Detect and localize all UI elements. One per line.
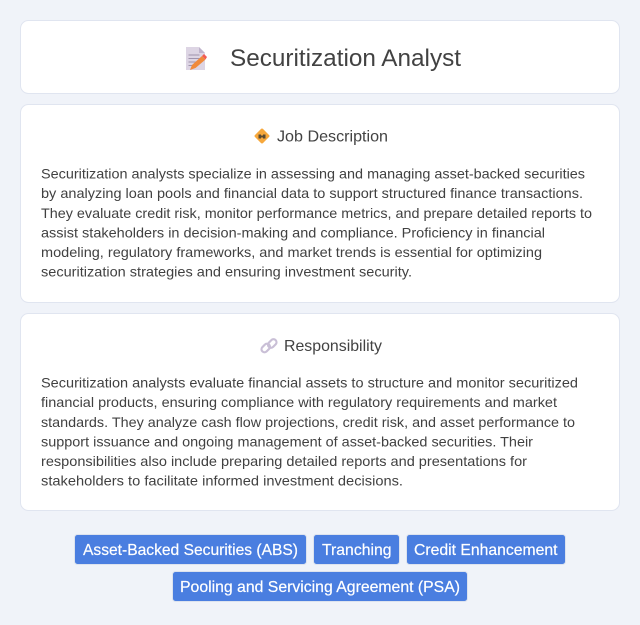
title text: Securitization Analyst xyxy=(230,45,461,72)
heading: responsibility: Responsibility xyxy=(284,338,382,355)
heading: job description: Job Description xyxy=(277,128,388,146)
text block: job description xyxy=(41,166,592,280)
text block: job description: Securitization analysts specialize in assessing and managing asset-backed securities xyxy=(41,166,585,182)
tag: credit enhancement: Credit Enhancement xyxy=(414,542,558,559)
text block: job description: They evaluate credit risk, monitor performance metrics, and prepare detailed reports to xyxy=(41,205,592,221)
tag: asset-backed securities: Asset-Backed Securities (ABS) xyxy=(83,542,298,559)
panel: title xyxy=(20,20,620,94)
panel: job description xyxy=(20,104,620,302)
tag: pooling and servicing agreement: Pooling and Servicing Agreement (PSA) xyxy=(180,579,460,596)
text block: job description: by analyzing loan pools and financial data to support structured finance transactions. xyxy=(41,185,583,201)
icon: chain link xyxy=(260,338,278,353)
text block: job description: modeling, regulatory frameworks, and market trends is essential for optimizing xyxy=(41,244,542,260)
text block: responsibility xyxy=(41,374,578,488)
icon: document with pencil xyxy=(186,47,207,70)
icon: diamond sign xyxy=(254,128,270,144)
tag: asset-backed securities xyxy=(74,534,306,564)
text block: responsibility: support issuance and ongoing management of asset-backed securities. Their xyxy=(41,434,533,450)
text block: responsibility: standards. They analyze cash flow projections, credit risk, and asset performance to xyxy=(41,414,575,430)
text block: responsibility: responsibilities also include preparing detailed reports and presentations for xyxy=(41,453,527,469)
tag: credit enhancement xyxy=(406,534,566,564)
text block: responsibility: financial products, ensuring compliance with regulatory requirements and market xyxy=(41,394,557,410)
text block: responsibility: Securitization analysts evaluate financial assets to structure and monitor securitized xyxy=(41,374,578,390)
tag: pooling and servicing agreement xyxy=(172,572,468,602)
text block: job description: assist stakeholders in decision-making and compliance. Proficiency in financial xyxy=(41,224,545,240)
text block: job description: securitization strategies and ensuring investment security. xyxy=(41,264,412,280)
tag: tranching: Tranching xyxy=(322,542,392,559)
text block: responsibility: stakeholders to facilitate informed investment decisions. xyxy=(41,472,403,488)
panel: responsibility xyxy=(20,314,620,510)
tag: tranching xyxy=(314,534,400,564)
